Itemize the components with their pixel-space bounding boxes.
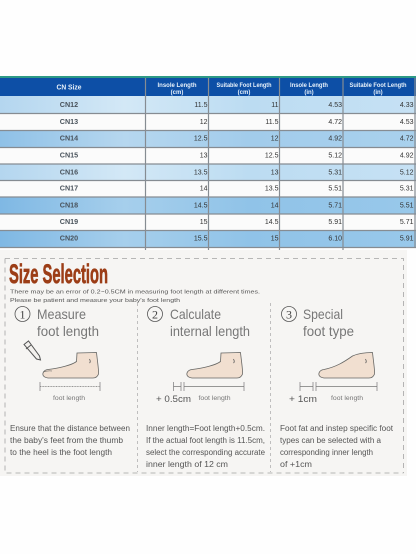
step 1 description: to the heel is the foot length	[10, 448, 112, 457]
size values: 12.5	[194, 136, 208, 142]
step 3 description: Foot fat and instep specific foot	[280, 424, 394, 433]
step 3 description: corresponding inner length	[280, 448, 373, 457]
step 2: calculate internal length: 2	[152, 308, 158, 322]
table header: (cm)	[238, 90, 250, 96]
size values: 5.12	[400, 170, 414, 176]
step 3: special foot type: 3	[286, 308, 292, 322]
size values: 13.5	[265, 186, 279, 192]
step 3: special foot type: + 1cm	[289, 394, 317, 405]
intro text: There may be an error of 0.2~0.5CM in measuring foot length at different times.	[10, 290, 260, 296]
size values: 12.5	[265, 152, 279, 160]
step 3: special foot type: Special	[303, 306, 343, 322]
step 2: calculate internal length: foot length	[198, 395, 231, 402]
size values: 12	[200, 119, 208, 126]
step 1 description	[10, 424, 130, 457]
plus 0.5cm ruler	[174, 382, 244, 391]
foot length ruler	[40, 382, 100, 391]
size labels: CN19	[60, 217, 78, 226]
size values: 5.91	[328, 219, 342, 226]
step 2: calculate internal length: Calculate	[170, 306, 221, 322]
plus 1cm ruler	[300, 382, 377, 391]
size values: 5.31	[400, 186, 414, 192]
table header: Insole Length	[158, 83, 197, 89]
icon: foot	[187, 352, 243, 378]
size values: 4.92	[400, 152, 414, 160]
size labels: CN12	[60, 100, 78, 109]
size values: 14.5	[194, 202, 208, 210]
size values: 13	[271, 170, 279, 176]
size values: 5.71	[328, 202, 342, 210]
step 3: special foot type: foot length	[331, 395, 363, 402]
size values: 12	[271, 136, 279, 142]
step 1: measure foot length: foot length	[53, 395, 85, 402]
panel: size selection	[0, 250, 407, 476]
size values: 11	[271, 102, 279, 109]
size values: 5.12	[328, 152, 342, 160]
table header: (in)	[373, 90, 383, 96]
step 3: special foot type: foot type	[303, 323, 354, 339]
heading: Size Selection	[9, 259, 108, 289]
step 1: measure foot length: foot length	[37, 323, 99, 339]
size values: 13.5	[194, 170, 208, 176]
intro text: Please be patient and measure your baby's foot length	[10, 298, 180, 304]
step 3 description	[280, 424, 394, 469]
step 3: special foot type	[280, 306, 394, 469]
size values: 6.10	[328, 236, 342, 242]
size values: 4.92	[328, 136, 342, 142]
icon: foot	[43, 352, 99, 378]
step 2: calculate internal length	[146, 306, 266, 469]
step 3 description: types can be selected with a	[280, 436, 382, 445]
size values: 5.31	[328, 170, 342, 176]
step 2 description: If the actual foot length is 11.5cm,	[146, 436, 265, 445]
step 2 description: Inner length=Foot length+0.5cm.	[146, 424, 265, 433]
step 2: calculate internal length: internal length	[170, 323, 250, 339]
step 1 description: Ensure that the distance between	[10, 424, 130, 433]
table header: Suitable Foot Length	[216, 83, 272, 89]
size labels: CN16	[60, 168, 78, 176]
step 2 description: inner length of 12 cm	[146, 460, 228, 469]
intro text	[10, 290, 260, 304]
size labels: CN17	[60, 184, 78, 192]
size values: 15	[271, 236, 279, 242]
size values: 15.5	[194, 236, 208, 242]
step 1: measure foot length: Measure	[37, 306, 86, 322]
table header: Insole Length	[290, 83, 328, 89]
step 3 description: of +1cm	[280, 460, 312, 469]
size values: 4.33	[400, 102, 414, 109]
size values: 5.51	[328, 186, 342, 192]
table header: CN Size	[56, 82, 82, 92]
size values: 5.71	[400, 219, 414, 226]
step 1 description: the baby's feet from the thumb	[10, 436, 124, 445]
size values: 5.51	[400, 202, 414, 210]
size values: 4.72	[400, 136, 414, 142]
size values: 4.53	[400, 119, 414, 126]
size values: 13	[200, 152, 208, 160]
icon: foot	[319, 352, 375, 378]
size values: 4.72	[328, 119, 342, 126]
size values: 11.5	[194, 102, 208, 109]
size labels: CN13	[60, 117, 78, 126]
step 1: measure foot length: 1	[20, 308, 26, 322]
size values: 14.5	[265, 219, 279, 226]
table header: (in)	[304, 90, 314, 96]
size values: 14	[271, 202, 279, 210]
size values: 5.91	[400, 236, 414, 242]
size labels: CN20	[60, 234, 78, 242]
size labels: CN14	[60, 134, 78, 142]
table header: Suitable Foot Length	[350, 83, 407, 89]
step 2: calculate internal length: + 0.5cm	[156, 394, 191, 405]
size labels	[60, 100, 78, 242]
table header	[56, 82, 407, 96]
icon: pencil	[24, 341, 40, 360]
size values	[194, 102, 414, 242]
size values: 15	[200, 219, 208, 226]
size labels: CN18	[60, 200, 78, 210]
size values: 4.53	[328, 102, 342, 109]
step 2 description	[146, 424, 266, 469]
size labels: CN15	[60, 150, 78, 160]
size values: 11.5	[265, 119, 279, 126]
step 1: measure foot length	[10, 306, 130, 457]
step 2 description: select the corresponding accurate	[146, 448, 266, 457]
size table	[0, 76, 416, 250]
size values: 14	[200, 186, 208, 192]
table header: (cm)	[171, 90, 183, 96]
